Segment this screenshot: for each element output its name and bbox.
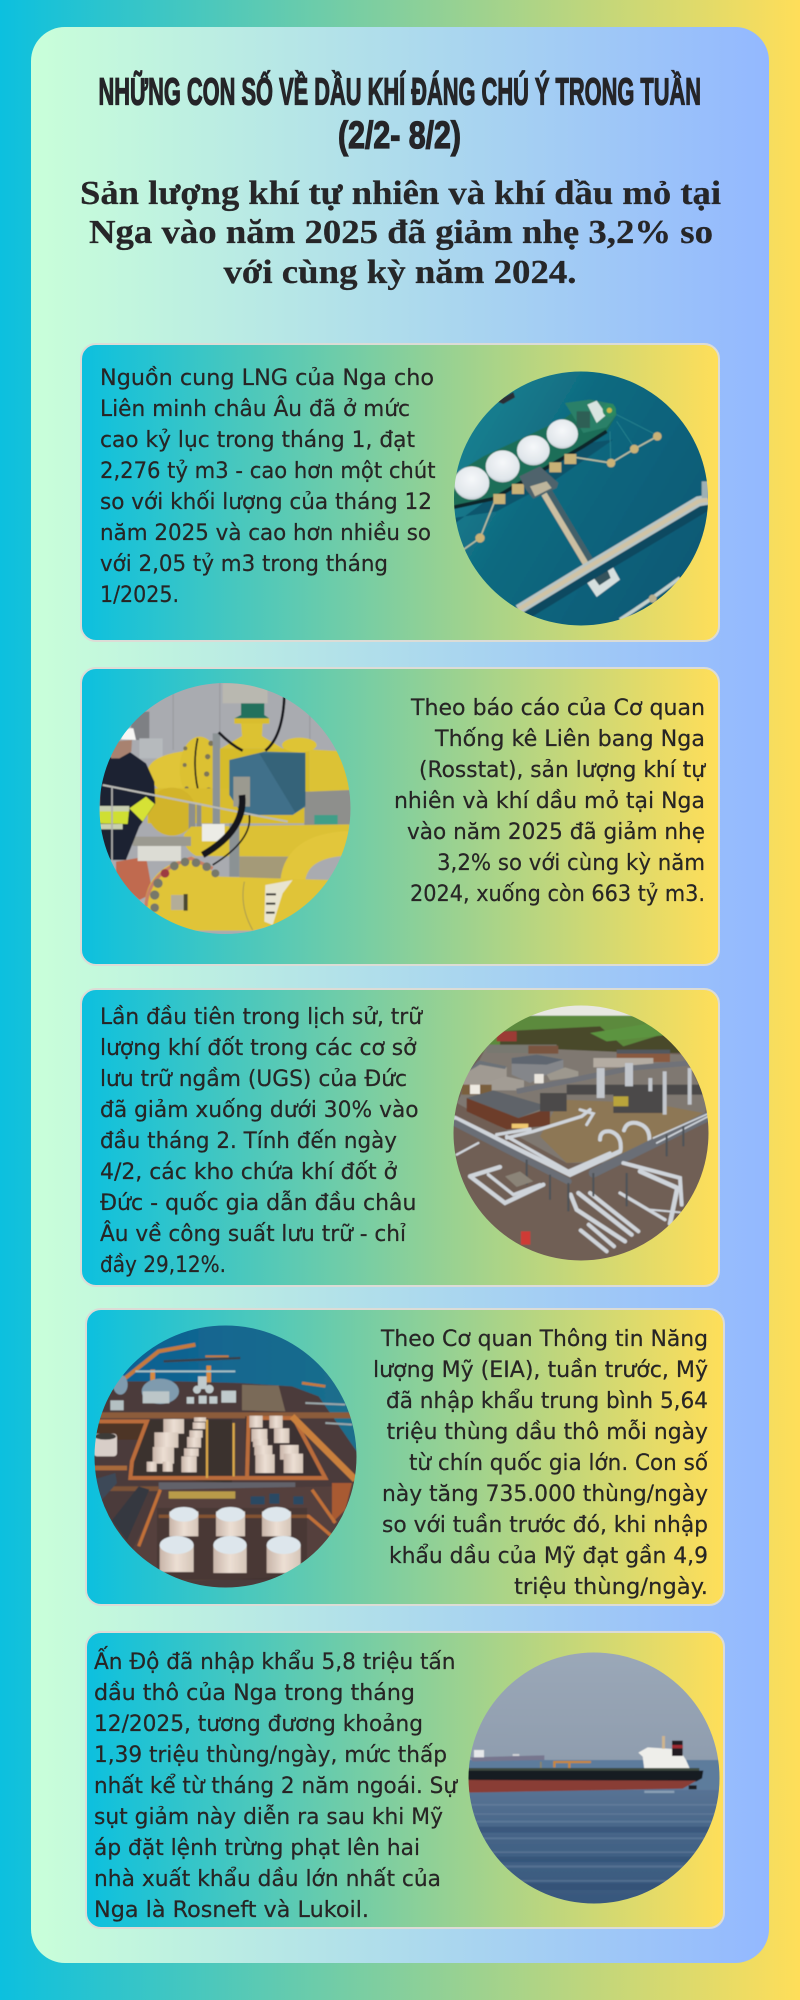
text: US crude imports: này tăng 735.000 thùng/ngày (382, 1482, 708, 1507)
text: India imports: áp đặt lệnh trừng phạt lên hai (94, 1836, 420, 1861)
image: gas storage plant (450, 1003, 712, 1265)
text: Russian gas output: nhiên và khí dầu mỏ tại Nga (394, 789, 705, 814)
text: German gas storage: đầy 29,12%. (100, 1253, 226, 1278)
text: Russian gas output: vào năm 2025 đã giảm nhẹ (407, 820, 705, 845)
text: LNG supply (100, 366, 436, 608)
subtitle: với cùng kỳ năm 2024. (224, 254, 576, 291)
text: US crude imports: so với tuần trước đó, khi nhập (382, 1513, 708, 1538)
text: India imports: Nga là Rosneft và Lukoil. (94, 1898, 369, 1923)
text: German gas storage: lượng khí đốt trong các cơ sở (100, 1036, 417, 1061)
text: LNG supply: so với khối lượng của tháng 12 (100, 490, 432, 515)
text: India imports: nhất kể từ tháng 2 năm ngoái. Sự (94, 1774, 458, 1799)
text: Russian gas output: 3,2% so với cùng kỳ năm (437, 851, 705, 876)
text: India imports: Ấn Độ đã nhập khẩu 5,8 triệu tấn (94, 1647, 456, 1675)
text: Russian gas output (394, 696, 706, 907)
text: LNG supply: 2,276 tỷ m3 - cao hơn một chút (100, 459, 436, 484)
text: German gas storage: 4/2, các kho chứa khí đốt ở (100, 1160, 398, 1185)
subtitle (80, 175, 721, 291)
panel: LNG supply (81, 344, 719, 641)
image: oil tank farm at night (92, 1323, 360, 1591)
image: LNG tanker at jetty (450, 368, 712, 630)
text: German gas storage: Lần đầu tiên trong lịch sử, trữ (100, 1005, 423, 1030)
text: LNG supply: Nguồn cung LNG của Nga cho (100, 366, 434, 391)
image: crude oil tanker at sea (466, 1650, 724, 1908)
text: US crude imports: đã nhập khẩu trung bình 5,64 (386, 1389, 708, 1414)
text: US crude imports: Theo Cơ quan Thông tin Năng (380, 1327, 708, 1352)
text: Russian gas output: 2024, xuống còn 663 tỷ m3. (410, 882, 705, 907)
text: India imports: nhà xuất khẩu dầu lớn nhất của (94, 1867, 441, 1892)
text: Russian gas output: (Rosstat), sản lượng khí tự (419, 758, 706, 783)
text: German gas storage: lưu trữ ngầm (UGS) của Đức (100, 1067, 407, 1092)
text: US crude imports: khẩu dầu của Mỹ đạt gần 4,9 (389, 1544, 708, 1569)
text: LNG supply: năm 2025 và cao hơn nhiều so (100, 521, 431, 546)
text: LNG supply: 1/2025. (100, 583, 179, 608)
text: US crude imports: triệu thùng/ngày. (514, 1575, 708, 1600)
text: German gas storage: đã giảm xuống dưới 30% vào (100, 1098, 419, 1123)
panel: Russian gas output (81, 668, 719, 965)
text: India imports: 12/2025, tương đương khoảng (94, 1712, 423, 1737)
text: India imports: sụt giảm này diễn ra sau khi Mỹ (94, 1804, 443, 1830)
image: yellow gas pipes (96, 680, 356, 940)
text: German gas storage: đầu tháng 2. Tính đến ngày (100, 1129, 397, 1154)
text: Russian gas output: Thống kê Liên bang Nga (434, 727, 705, 752)
text: LNG supply: với 2,05 tỷ m3 trong tháng (100, 552, 388, 577)
text: US crude imports: triệu thùng dầu thô mỗi ngày (386, 1419, 708, 1445)
text: US crude imports: lượng Mỹ (EIA), tuần trước, Mỹ (373, 1358, 708, 1383)
text: India imports (94, 1647, 458, 1923)
title: (2/2- 8/2) (338, 115, 461, 157)
panel: India imports (86, 1632, 724, 1928)
subtitle: Nga vào năm 2025 đã giảm nhẹ 3,2% so (89, 214, 713, 251)
text: US crude imports: từ chín quốc gia lớn. Con số (409, 1451, 709, 1476)
subtitle: Sản lượng khí tự nhiên và khí dầu mỏ tại (80, 175, 721, 212)
text: India imports: dầu thô của Nga trong tháng (94, 1681, 415, 1706)
text: German gas storage: Đức - quốc gia dẫn đầu châu (100, 1190, 416, 1216)
text: LNG supply: cao kỷ lục trong tháng 1, đạt (100, 428, 415, 453)
panel: German gas storage (81, 989, 719, 1286)
text: German gas storage (100, 1005, 423, 1278)
text: Russian gas output: Theo báo cáo của Cơ quan (410, 696, 705, 721)
title (98, 68, 701, 157)
text: German gas storage: Âu về công suất lưu trữ - chỉ (100, 1221, 406, 1247)
text: India imports: 1,39 triệu thùng/ngày, mức thấp (94, 1743, 447, 1768)
panel: US crude imports (86, 1309, 724, 1605)
text: US crude imports (373, 1327, 709, 1600)
text: LNG supply: Liên minh châu Âu đã ở mức (100, 396, 410, 422)
